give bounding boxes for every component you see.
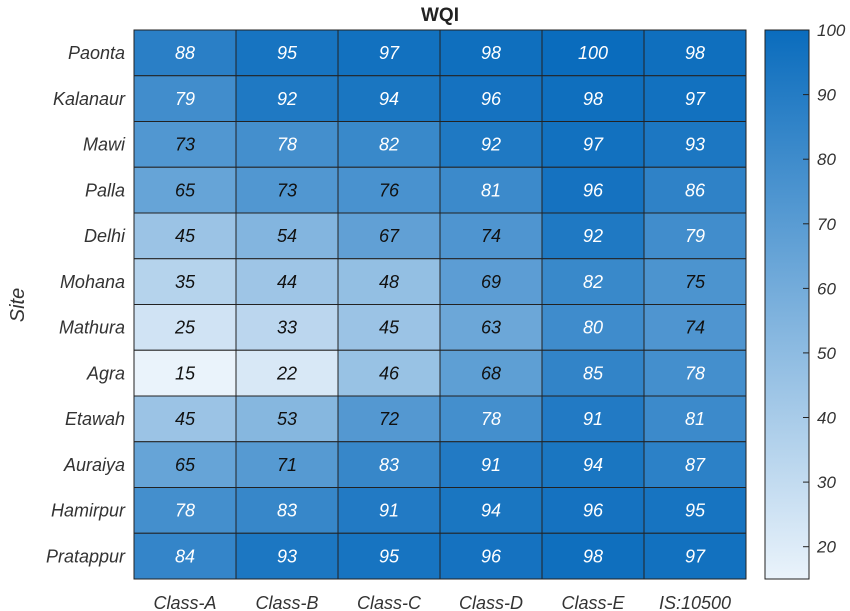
row labels: Palla <box>85 180 125 200</box>
heatmap: 93 <box>277 546 297 566</box>
heatmap: 65 <box>175 180 196 200</box>
heatmap: 74 <box>481 226 501 246</box>
heatmap: 76 <box>379 180 400 200</box>
row labels: Mathura <box>59 318 125 338</box>
heatmap: 93 <box>685 134 705 154</box>
heatmap: 94 <box>481 500 501 520</box>
heatmap: 53 <box>277 409 297 429</box>
colorbar: 20 <box>816 538 836 557</box>
heatmap: 72 <box>379 409 399 429</box>
heatmap: 96 <box>583 500 604 520</box>
heatmap: 80 <box>583 318 603 338</box>
row labels: Auraiya <box>63 455 125 475</box>
heatmap: 95 <box>379 546 400 566</box>
heatmap: 84 <box>175 546 195 566</box>
heatmap: 98 <box>481 43 501 63</box>
heatmap: 92 <box>583 226 603 246</box>
heatmap: 91 <box>481 455 501 475</box>
heatmap: 78 <box>685 363 705 383</box>
row labels: Hamirpur <box>51 500 126 520</box>
heatmap: 100 <box>578 43 608 63</box>
heatmap: 69 <box>481 272 501 292</box>
column labels <box>153 593 731 611</box>
heatmap: 83 <box>277 500 297 520</box>
heatmap: 45 <box>175 409 196 429</box>
heatmap: 92 <box>277 89 297 109</box>
heatmap: 48 <box>379 272 399 292</box>
heatmap: 85 <box>583 363 604 383</box>
row labels <box>46 43 126 566</box>
heatmap: 44 <box>277 272 297 292</box>
heatmap: 81 <box>685 409 705 429</box>
heatmap: 96 <box>481 89 502 109</box>
row labels: Delhi <box>84 226 126 246</box>
colorbar: 60 <box>817 279 836 298</box>
row labels: Mohana <box>60 272 125 292</box>
heatmap: 73 <box>175 134 195 154</box>
heatmap: 65 <box>175 455 196 475</box>
heatmap: 54 <box>277 226 297 246</box>
heatmap: 92 <box>481 134 501 154</box>
row labels: Mawi <box>83 134 126 154</box>
row labels: Agra <box>86 363 125 383</box>
heatmap: 79 <box>685 226 705 246</box>
heatmap: 83 <box>379 455 399 475</box>
heatmap: 98 <box>583 546 603 566</box>
heatmap: 82 <box>583 272 603 292</box>
heatmap: 63 <box>481 318 501 338</box>
heatmap: 71 <box>277 455 297 475</box>
colorbar: 50 <box>817 344 836 363</box>
colorbar: 40 <box>817 408 836 428</box>
heatmap: 86 <box>685 180 706 200</box>
title: WQI <box>421 5 459 26</box>
colorbar: 80 <box>817 150 836 169</box>
heatmap: 78 <box>277 134 297 154</box>
heatmap: 97 <box>583 134 604 154</box>
heatmap: 33 <box>277 318 297 338</box>
heatmap: 97 <box>685 89 706 109</box>
colorbar: 70 <box>817 215 836 234</box>
heatmap: 88 <box>175 43 195 63</box>
heatmap: 98 <box>685 43 705 63</box>
heatmap: 87 <box>685 455 706 475</box>
heatmap: 94 <box>583 455 603 475</box>
heatmap: 74 <box>685 318 705 338</box>
row labels: Kalanaur <box>53 89 126 109</box>
heatmap: 78 <box>481 409 501 429</box>
heatmap: 25 <box>174 318 196 338</box>
heatmap: 45 <box>379 318 400 338</box>
heatmap: 67 <box>379 226 400 246</box>
heatmap: 73 <box>277 180 297 200</box>
colorbar: 30 <box>817 473 836 492</box>
heatmap: 78 <box>175 500 195 520</box>
heatmap: 35 <box>175 272 196 292</box>
heatmap: 45 <box>175 226 196 246</box>
heatmap: 94 <box>379 89 399 109</box>
heatmap: 91 <box>583 409 603 429</box>
colorbar: 90 <box>817 86 836 105</box>
row labels: Pratappur <box>46 546 126 566</box>
heatmap: 46 <box>379 363 400 383</box>
colorbar: 100 <box>817 21 846 40</box>
heatmap: 91 <box>379 500 399 520</box>
heatmap <box>134 30 746 579</box>
heatmap: 81 <box>481 180 501 200</box>
row labels: Etawah <box>65 409 125 429</box>
heatmap: 15 <box>175 363 196 383</box>
row labels: Paonta <box>68 43 125 63</box>
heatmap: 96 <box>481 546 502 566</box>
heatmap: 96 <box>583 180 604 200</box>
heatmap: 95 <box>277 43 298 63</box>
heatmap: 79 <box>175 89 195 109</box>
colorbar <box>765 21 846 579</box>
y axis label: Site <box>7 288 29 322</box>
heatmap: 97 <box>685 546 706 566</box>
heatmap: 95 <box>685 500 706 520</box>
heatmap: 75 <box>685 272 706 292</box>
heatmap: 98 <box>583 89 603 109</box>
heatmap: 68 <box>481 363 501 383</box>
heatmap: 82 <box>379 134 399 154</box>
heatmap: 97 <box>379 43 400 63</box>
heatmap: 22 <box>276 363 297 383</box>
